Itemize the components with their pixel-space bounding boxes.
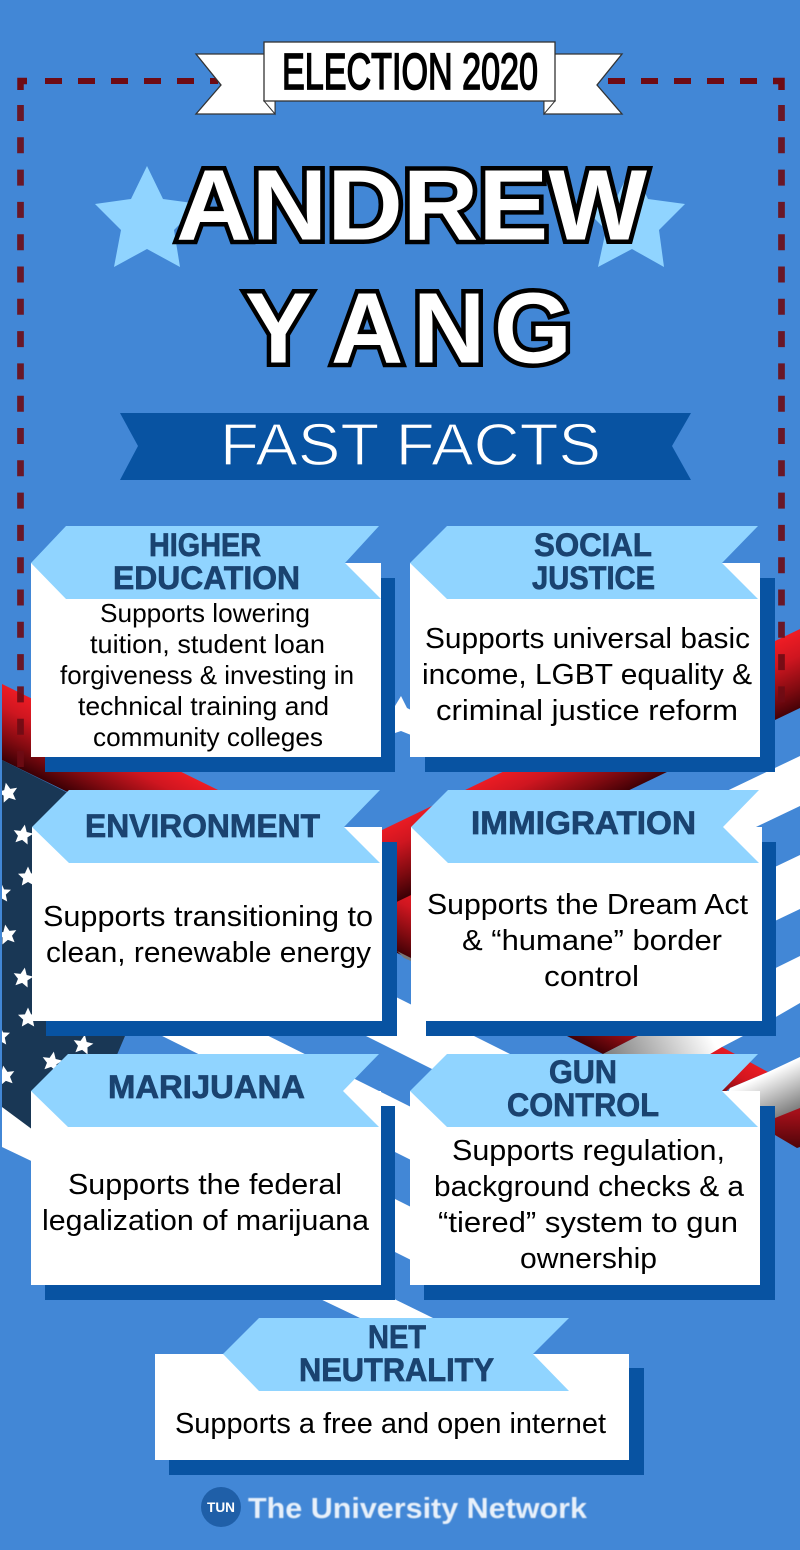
panel: marijuana [31,1054,395,1300]
icon: right star [580,166,685,267]
panel: immigration: IMMIGRATION [471,805,696,841]
panel: gun control: GUN [549,1054,617,1090]
panel: environment [32,790,397,1036]
panel: higher education: EDUCATION [113,560,300,596]
panel: higher education [31,526,395,772]
panel: social justice: income, LGBT equality & [422,659,752,691]
logo: the university network: The University Network [248,1493,588,1525]
panel: gun control: Supports regulation, [452,1135,725,1167]
fast facts banner: FAST FACTS [220,412,601,478]
panel: social justice: SOCIAL [534,527,652,563]
panel: net neutrality: NEUTRALITY [299,1352,494,1388]
panel: social justice: criminal justice reform [436,695,738,727]
panel: marijuana: legalization of marijuana [42,1205,370,1237]
panel: gun control: ownership [520,1243,657,1275]
panel: social justice: JUSTICE [532,560,655,596]
panel: net neutrality [155,1318,644,1475]
dashed border [20,81,782,769]
panel: marijuana: Supports the federal [68,1169,342,1201]
panel: environment: Supports transitioning to [43,901,373,933]
banner: election 2020 [196,42,622,114]
panel: social justice [410,526,775,772]
panel: immigration [411,790,776,1036]
panel: net neutrality: Supports a free and open internet [175,1408,606,1440]
panel: higher education: forgiveness & investing in [60,660,354,690]
panel: gun control: background checks & a [434,1171,745,1203]
panel: gun control: CONTROL [507,1087,659,1123]
panel: immigration: control [544,961,639,993]
panel: gun control: “tiered” system to gun [438,1207,738,1239]
title: yang: YANG [245,272,572,384]
panel: higher education: technical training and [78,691,329,721]
flag background [0,629,800,1318]
panel: higher education: tuition, student loan [90,629,325,659]
panel: immigration: Supports the Dream Act [427,889,748,921]
title: andrew: ANDREW [176,150,648,262]
panel: gun control [410,1054,775,1300]
panel: higher education: HIGHER [149,527,261,563]
banner: election 2020: ELECTION 2020 [282,43,538,100]
icon: left star [95,166,200,267]
panel: marijuana: MARIJUANA [108,1069,305,1105]
logo: the university network [201,1487,588,1527]
logo: the university network: TUN [207,1499,235,1515]
panel: higher education: community colleges [93,722,323,752]
panel: environment: clean, renewable energy [46,937,372,969]
panel: net neutrality: NET [368,1319,426,1355]
panel: higher education: Supports lowering [100,598,310,628]
panel: immigration: & “humane” border [462,925,722,957]
panel: environment: ENVIRONMENT [85,808,320,844]
fast facts banner [120,412,691,480]
panel: social justice: Supports universal basic [425,623,750,655]
